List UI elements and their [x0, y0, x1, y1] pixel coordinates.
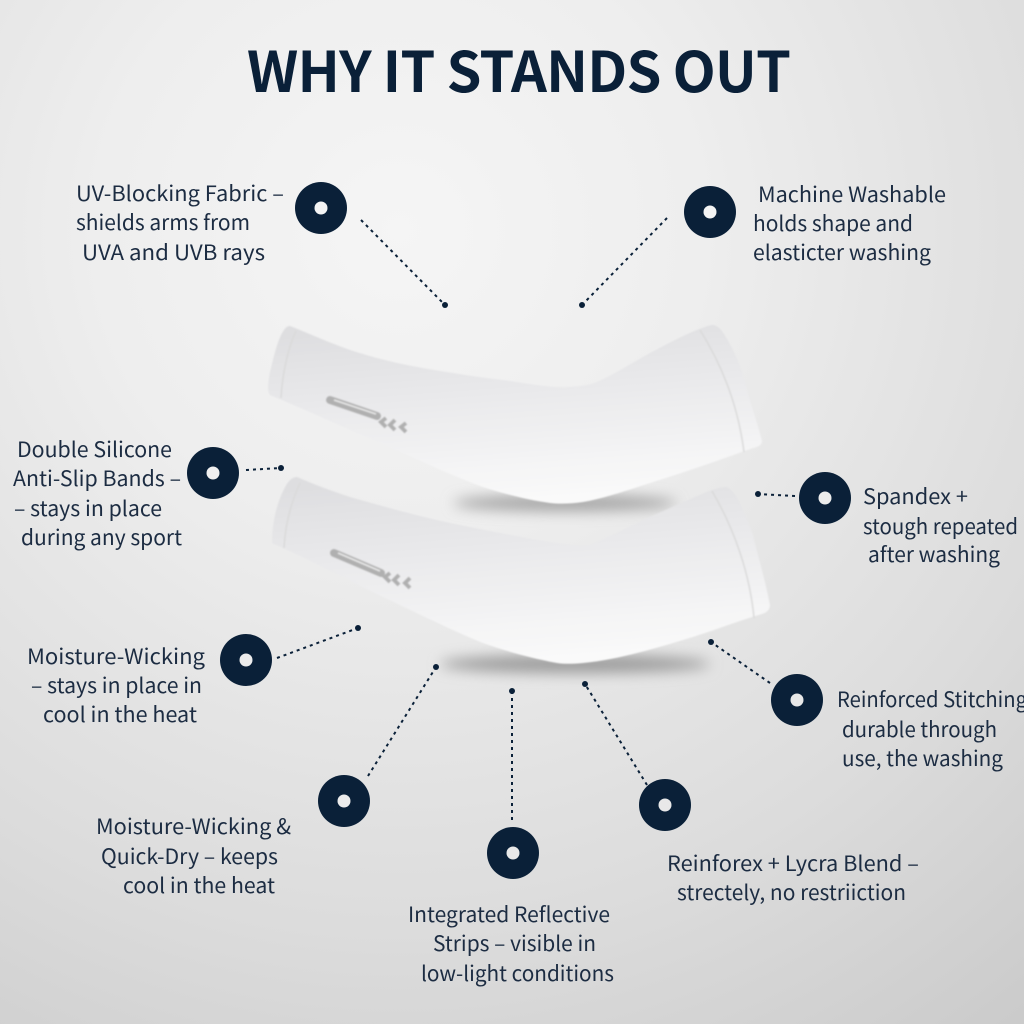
callout: UV-blocking fabric [76, 178, 448, 308]
callout: UV-blocking fabric: shields arms from [76, 207, 250, 237]
callout: UV-blocking fabric: UV-Blocking Fabric – [76, 178, 284, 208]
callout: UV-blocking fabric: UVA and UVB rays [82, 237, 265, 267]
callout: reinforced stitching: use, the washing [842, 743, 1003, 773]
callout: double silicone bands: Double Silicone [17, 434, 172, 464]
shadow: lower sleeve [440, 655, 710, 673]
callout: moisture-wicking: cool in the heat [43, 699, 197, 729]
callout: lycra blend: Reinforex + Lycra Blend – [667, 848, 919, 878]
callout: reinforced stitching: durable through [842, 714, 997, 744]
callout: moisture-wicking [27, 625, 361, 729]
callout: lycra blend: strectely, no restriiction [677, 877, 906, 907]
callout: machine washable: elasticter washing [753, 237, 931, 267]
callout: reinforced stitching [708, 639, 1024, 773]
callout: spandex [755, 472, 1018, 569]
callout: moisture-wicking: – stays in place in [31, 670, 202, 700]
callout: spandex: stough repeated [863, 511, 1018, 541]
upper sleeve cuff seams [281, 330, 744, 452]
callout: double silicone bands: – stays in place [14, 493, 162, 523]
title: WHY IT STANDS OUT [247, 28, 791, 109]
upper arm sleeve [268, 325, 762, 504]
lower arm sleeve [272, 477, 770, 664]
callout: integrated reflective strips [408, 688, 614, 988]
lower sleeve cuff seams [284, 483, 754, 618]
callout: moisture-wicking: Moisture-Wicking [27, 641, 205, 671]
callout: moisture-wicking and quick-dry [96, 664, 439, 900]
callout: moisture-wicking and quick-dry: cool in the heat [123, 870, 275, 900]
callout: spandex: Spandex + [863, 481, 968, 511]
callout: double silicone bands: during any sport [21, 522, 182, 552]
lower reflective strip [334, 553, 410, 588]
callout: integrated reflective strips: Integrated Reflective [408, 899, 610, 929]
callout: machine washable [579, 179, 946, 308]
callout: spandex: after washing [868, 539, 1000, 569]
callout: moisture-wicking and quick-dry: Quick-Dry – keeps [101, 841, 278, 871]
upper reflective strip [330, 400, 406, 432]
callout: machine washable: Machine Washable [758, 179, 946, 209]
callout: integrated reflective strips: low-light conditions [421, 958, 614, 988]
callout: integrated reflective strips: Strips – visible in [433, 928, 596, 958]
callout: lycra blend [582, 681, 919, 907]
callout: machine washable: holds shape and [753, 208, 913, 238]
callout: moisture-wicking and quick-dry: Moisture-Wicking & [96, 811, 291, 841]
shadow: upper sleeve [453, 495, 677, 511]
callout: double silicone bands: Anti-Slip Bands – [13, 463, 181, 493]
callout: double silicone bands [13, 434, 284, 552]
